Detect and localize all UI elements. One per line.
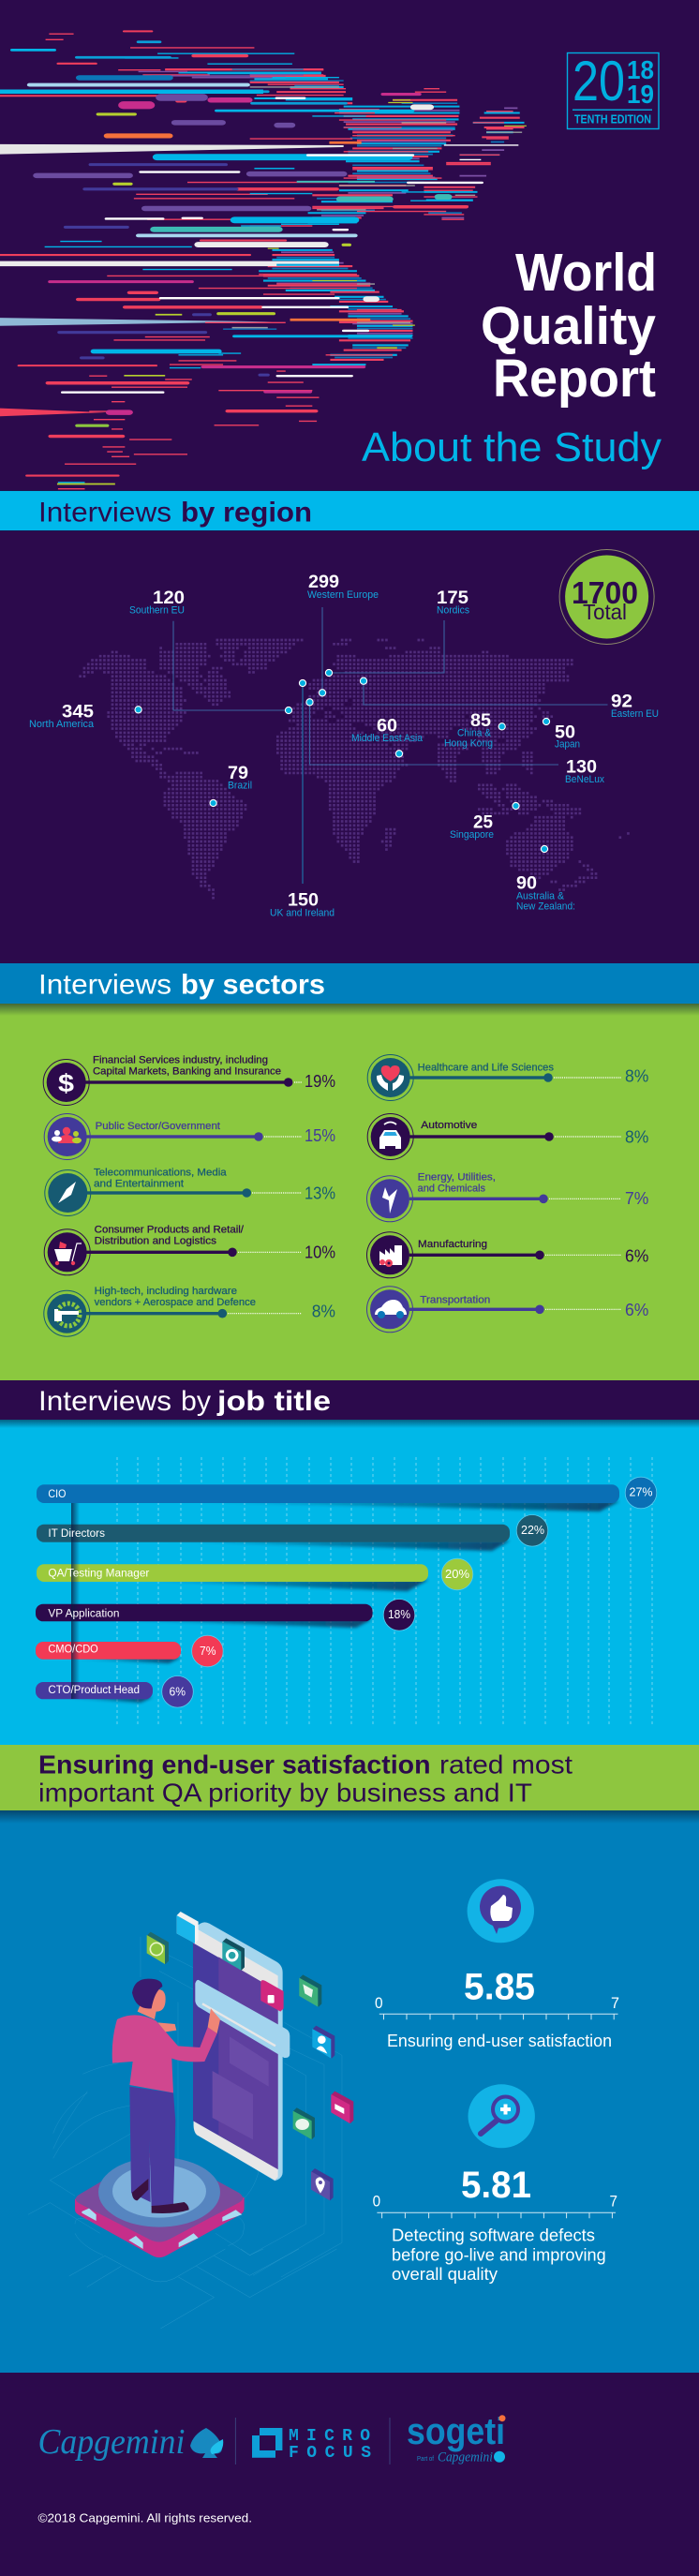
region values: 90 — [516, 872, 537, 893]
stat: end-user satisfaction 5.85 — [375, 1966, 619, 2050]
phone — [193, 1922, 290, 2181]
region values: 120 — [153, 588, 185, 608]
panel: region background — [0, 531, 699, 963]
stat: end-user satisfaction 5.85: 5.85 — [464, 1966, 535, 2007]
region names — [29, 589, 659, 918]
sector: energy 7% — [367, 1172, 648, 1222]
region connector lines — [173, 607, 607, 884]
region names: Southern EU — [129, 604, 185, 616]
region values: 79 — [228, 763, 248, 783]
sector: healthcare 8% — [367, 1055, 648, 1100]
heading: interviews by job title — [0, 1380, 699, 1420]
heading: interviews by region: by region — [181, 498, 312, 529]
logo: Sogeti: sogeti — [407, 2411, 505, 2452]
heading: interviews by job title: job title — [216, 1386, 331, 1417]
sector: transportation 6% — [367, 1287, 648, 1333]
sector: telecommunications 13%: Telecommunications, Media — [94, 1167, 227, 1178]
sector: telecommunications 13%: 13% — [305, 1184, 335, 1202]
icon: magnifying glass — [468, 2084, 535, 2148]
icon: thumbs up — [468, 1879, 534, 1943]
sector: public sector 15% — [44, 1113, 335, 1160]
region names: China & — [457, 728, 492, 739]
region location dots — [135, 669, 550, 853]
sector: transportation 6%: 6% — [625, 1301, 648, 1319]
region names: UK and Ireland — [270, 907, 335, 918]
sector: financial services 19%: 19% — [305, 1072, 335, 1091]
sector: public sector 15%: Public Sector/Government — [96, 1121, 220, 1132]
panel: hero background — [0, 0, 699, 491]
heading: interviews by region: Interviews — [38, 498, 171, 529]
illustration: person using oversized smartphone — [75, 1912, 353, 2257]
heading: end-user satisfaction: rated most — [439, 1750, 573, 1779]
logo: Micro Focus: MICRO — [289, 2427, 370, 2446]
sector: manufacturing 6%: Manufacturing — [418, 1239, 487, 1250]
heading: interviews by job title: Interviews — [38, 1386, 171, 1417]
region values: 50 — [555, 722, 575, 742]
edition badge: 18 — [627, 55, 654, 84]
bar chart: interviews by job title: 7% — [200, 1644, 216, 1658]
sector: energy 7%: Energy, Utilities, — [418, 1172, 496, 1184]
panel: sectors background — [0, 1004, 699, 1380]
region names: New Zealand: — [516, 901, 575, 912]
sector: financial services 19%: $ — [58, 1069, 74, 1097]
stat: detecting software defects 5.81: Detecting software defects — [392, 2226, 595, 2245]
sector: automotive 8%: Automotive — [421, 1120, 477, 1131]
bar chart: interviews by job title: CIO — [48, 1489, 66, 1500]
sector: consumer products 10%: Distribution and Logistics — [95, 1236, 217, 1247]
logo: Micro Focus: FOCUS — [289, 2444, 371, 2463]
region names: Japan — [555, 739, 580, 751]
bar chart: interviews by job title: CTO/Product Head — [48, 1685, 140, 1696]
region names: Singapore — [450, 829, 494, 841]
sector: high-tech 8%: High-tech, including hardware — [95, 1286, 237, 1297]
copyright: ©2018 Capgemini. All rights reserved. — [37, 2511, 252, 2525]
sector: energy 7%: 7% — [625, 1189, 648, 1208]
stat: detecting software defects 5.81: 0 — [373, 2192, 380, 2210]
heading: interviews by region — [0, 490, 699, 532]
panel: job title background — [0, 1420, 699, 1745]
region names: Australia & — [516, 890, 565, 901]
bar chart: interviews by job title — [36, 1477, 657, 1707]
sector: telecommunications 13%: and Entertainment — [94, 1178, 184, 1189]
region values — [62, 572, 632, 911]
sector: consumer products 10% — [44, 1225, 335, 1275]
stat: end-user satisfaction 5.85: 0 — [375, 1994, 383, 2012]
stat: detecting software defects 5.81: 5.81 — [461, 2165, 531, 2206]
bar chart: interviews by job title: 27% — [630, 1485, 653, 1499]
stat: end-user satisfaction 5.85: 7 — [611, 1994, 619, 2012]
bar chart: interviews by job title: VP Application — [48, 1609, 119, 1620]
sector: high-tech 8% — [44, 1286, 335, 1336]
panel: priority background — [0, 1810, 699, 2373]
person — [112, 1979, 220, 2213]
region values: 85 — [470, 710, 491, 731]
region names: Western Europe — [307, 589, 379, 601]
bar chart: interviews by job title: 6% — [169, 1684, 186, 1698]
sector: financial services 19%: Financial Services industry, including — [93, 1055, 268, 1066]
heading: interviews by sectors: Interviews — [38, 970, 171, 1001]
stat: detecting software defects 5.81: overall quality — [392, 2265, 498, 2284]
edition badge: 20 — [573, 50, 625, 112]
bar chart: interviews by job title: CMO/CDO — [48, 1645, 98, 1656]
app icons — [147, 1912, 353, 2200]
bar chart: interviews by job title: IT Directors — [48, 1528, 105, 1540]
edition badge — [568, 50, 659, 129]
stat: detecting software defects 5.81: 7 — [609, 2192, 617, 2210]
heading: interviews by job title: by — [181, 1386, 211, 1417]
heading: interviews by sectors: by sectors — [181, 970, 325, 1001]
sector: transportation 6%: Transportation — [420, 1294, 490, 1305]
total callout: Total — [583, 600, 627, 624]
edition badge: TENTH EDITION — [574, 112, 651, 126]
sector: manufacturing 6%: 6% — [625, 1247, 648, 1266]
logo: Capgemini: Capgemini — [37, 2422, 186, 2462]
artwork: runner made of coloured speed streaks — [0, 31, 527, 489]
sector: automotive 8%: 8% — [625, 1127, 648, 1146]
bar chart: interviews by job title: QA/Testing Manager — [48, 1568, 150, 1579]
sector: consumer products 10%: Consumer Products and Retail/ — [95, 1225, 244, 1236]
subtitle: About the Study — [362, 424, 662, 470]
title: World — [515, 243, 657, 303]
region values: 175 — [437, 588, 468, 608]
region names: Middle East Asia — [351, 733, 423, 744]
heading: end-user satisfaction — [0, 1745, 699, 1810]
platform — [75, 2152, 245, 2257]
logo: Sogeti: Part of — [417, 2456, 434, 2463]
total callout: 1700 — [572, 575, 638, 610]
sector: healthcare 8%: Healthcare and Life Sciences — [418, 1062, 555, 1073]
sector: manufacturing 6% — [367, 1232, 648, 1278]
stat: end-user satisfaction 5.85: Ensuring end-user satisfaction — [387, 2032, 612, 2050]
title: Quality — [481, 296, 656, 356]
stat: detecting software defects 5.81 — [373, 2165, 617, 2284]
region names: Brazil — [228, 781, 252, 792]
region values: 130 — [566, 756, 597, 777]
sector: automotive 8% — [367, 1113, 648, 1160]
sector: telecommunications 13% — [45, 1167, 335, 1216]
sector: healthcare 8%: 8% — [625, 1066, 648, 1085]
region names: North America — [29, 719, 94, 730]
region names: Eastern EU — [611, 708, 659, 720]
sector: financial services 19% — [43, 1055, 335, 1106]
world dot map — [79, 640, 631, 898]
region values: 150 — [288, 890, 319, 911]
heading: end-user satisfaction: important QA priority by business and IT — [38, 1779, 532, 1808]
region values: 25 — [473, 812, 493, 832]
region names: BeNeLux — [565, 774, 605, 785]
title: Report — [493, 349, 656, 409]
region values: 92 — [611, 691, 632, 711]
region names: Hong Kong — [444, 738, 493, 750]
heading: interviews by sectors — [0, 963, 699, 1004]
circuit background lines — [28, 1937, 342, 2329]
panel: footer background — [0, 2373, 699, 2576]
logo: Sogeti: Capgemini — [438, 2450, 493, 2465]
sector: consumer products 10%: 10% — [305, 1243, 335, 1261]
bar chart: interviews by job title: 18% — [388, 1607, 410, 1621]
bar chart: interviews by job title: 20% — [445, 1567, 469, 1581]
sector: high-tech 8%: 8% — [312, 1303, 335, 1321]
total callout — [559, 549, 654, 645]
stat: detecting software defects 5.81: before go-live and improving — [392, 2246, 606, 2265]
region values: 299 — [308, 572, 339, 592]
sector: financial services 19%: Capital Markets, Banking and Insurance — [93, 1066, 281, 1078]
region values: 60 — [377, 716, 397, 737]
title — [481, 243, 657, 409]
logo: Micro Focus — [252, 2427, 371, 2463]
sector: public sector 15%: 15% — [305, 1126, 335, 1145]
sector: high-tech 8%: vendors + Aerospace and Defence — [95, 1297, 256, 1308]
region names: Nordics — [437, 604, 470, 616]
heading: end-user satisfaction: Ensuring end-user satisfaction — [38, 1750, 431, 1779]
sector: energy 7%: and Chemicals — [418, 1184, 486, 1195]
logo divider — [235, 2418, 390, 2464]
bar chart: interviews by job title: 22% — [521, 1523, 544, 1537]
edition badge: 19 — [627, 80, 654, 109]
region values: 345 — [62, 702, 94, 722]
